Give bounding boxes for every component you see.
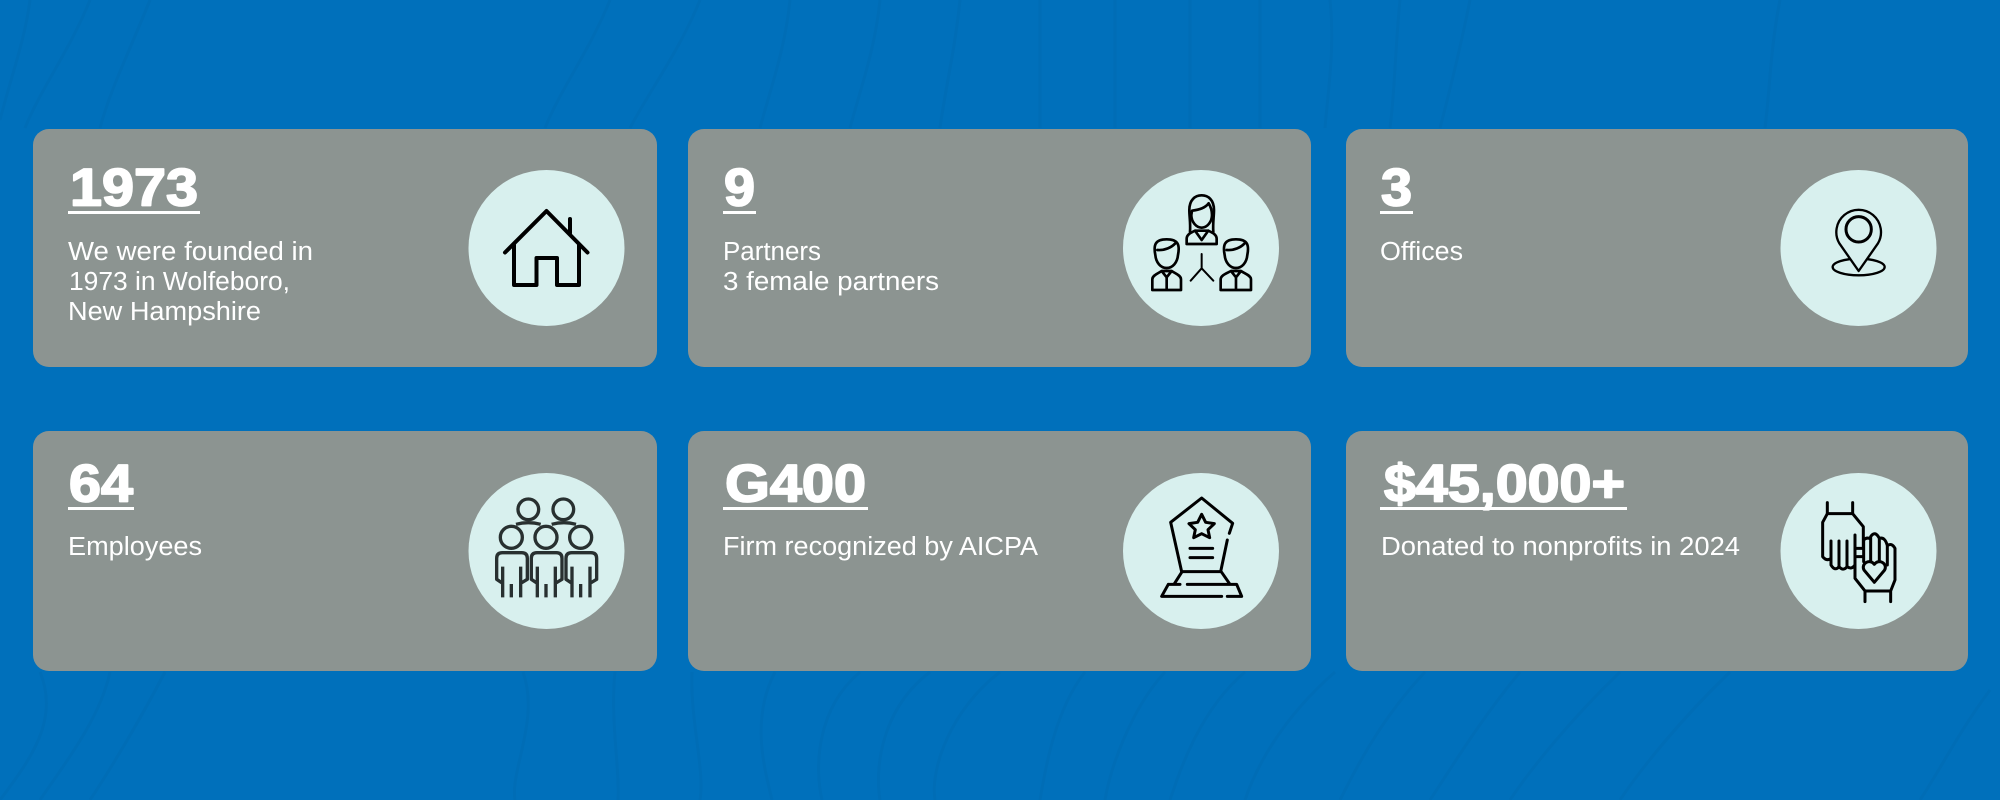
panel: donations — [1346, 431, 1968, 671]
heading underline — [68, 507, 134, 510]
icon circle — [468, 170, 624, 326]
text: employees description: Employees — [68, 533, 202, 561]
icon circle — [1123, 473, 1279, 629]
heading: $45,000+: $45,000+ — [1384, 454, 1625, 514]
heading underline — [1380, 507, 1627, 510]
icon: house — [505, 211, 588, 285]
panel: offices — [1346, 129, 1968, 367]
text: partners description: 3 female partners — [723, 268, 939, 296]
heading underline — [723, 211, 756, 214]
text: founded description — [68, 238, 313, 326]
heading: 64: 64 — [69, 454, 134, 514]
text: G400 description: Firm recognized by AICPA — [723, 533, 1038, 561]
heading underline — [1380, 211, 1413, 214]
icon: location pin — [1833, 210, 1885, 275]
text: founded description: New Hampshire — [68, 298, 261, 326]
panel: founded 1973 — [33, 129, 657, 367]
icon: helping hands with heart — [1823, 503, 1895, 602]
icon: three partners — [1152, 195, 1251, 290]
icon circle — [1780, 170, 1936, 326]
text: partners description — [723, 238, 939, 296]
icon: group of people — [497, 499, 597, 597]
text: partners description: Partners — [723, 238, 821, 266]
icon circle — [1780, 473, 1936, 629]
heading: 3: 3 — [1381, 158, 1412, 218]
icon circle — [468, 473, 624, 629]
icon circle — [1123, 170, 1279, 326]
icon: award trophy — [1162, 498, 1242, 596]
text: founded description: 1973 in Wolfeboro, — [69, 268, 290, 296]
text: offices description: Offices — [1380, 238, 1463, 266]
heading: 9: 9 — [724, 158, 755, 218]
text: founded description: We were founded in — [68, 238, 313, 266]
heading underline — [723, 507, 868, 510]
panel: partners — [688, 129, 1311, 367]
heading: G400: G400 — [725, 454, 866, 514]
panel: G400 — [688, 431, 1311, 671]
heading: 1973: 1973 — [70, 158, 198, 218]
text: donation description: Donated to nonprofits in 2024 — [1381, 533, 1740, 561]
heading underline — [68, 211, 200, 214]
panel: employees — [33, 431, 657, 671]
